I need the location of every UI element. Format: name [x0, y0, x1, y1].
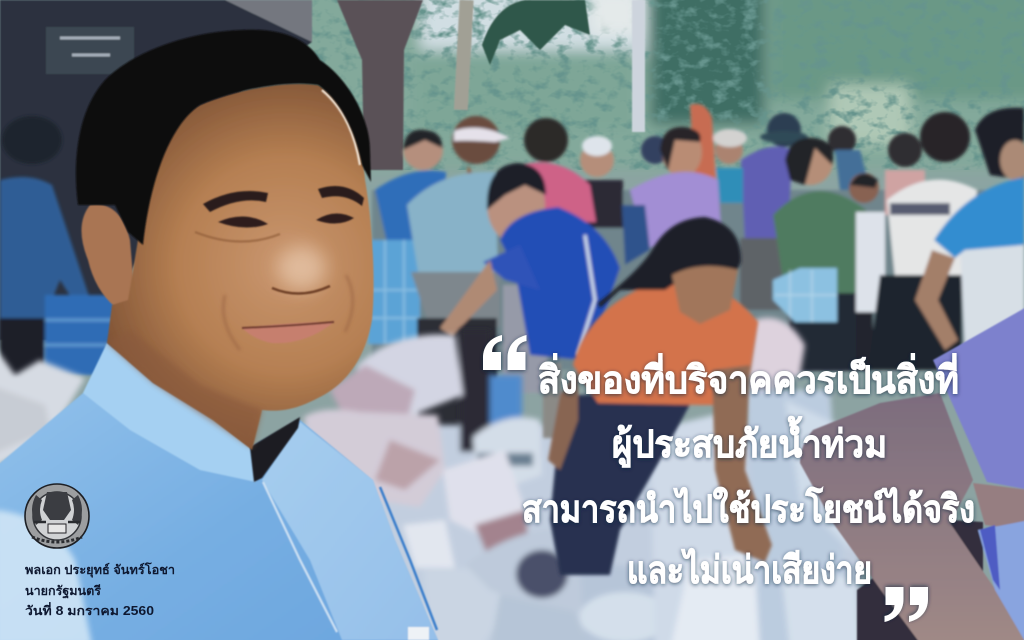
shirt bright left fold [0, 510, 92, 640]
tree trunks, pole and palm leaves [337, 0, 645, 170]
man in blue sports shirt [440, 163, 620, 360]
building at top left [0, 0, 312, 340]
quote text: สิ่งของที่บริจาคควรเป็นสิ่งที่ [538, 353, 959, 402]
eyes [195, 213, 354, 242]
left man in blue loading water [0, 116, 115, 378]
ear [81, 204, 135, 307]
icon: closing quote mark [884, 587, 928, 622]
eyebrows [203, 186, 364, 212]
inner dark collar and neck shadow [250, 417, 300, 482]
forehead edge highlight [322, 90, 360, 165]
foreground person: arm and sleeve at right [800, 305, 1024, 640]
smile lines [223, 275, 353, 350]
caption: name, title and date [25, 562, 175, 618]
trees and sky [0, 0, 1024, 340]
woman in red-orange shirt, rear [690, 104, 716, 180]
woman in orange shirt sorting bags [543, 217, 772, 575]
government seal [25, 484, 89, 548]
quote text: และไม่เน่าเสียง่าย [627, 548, 872, 592]
blue polo man [375, 130, 446, 265]
woman with visor [407, 116, 510, 443]
woman in lilac polo [622, 127, 722, 265]
shirt edge [380, 487, 437, 630]
smile [242, 322, 334, 343]
shirt placket line [263, 482, 337, 632]
child in cap with blue shirt [713, 129, 747, 203]
woman in green shirt holding bottles [773, 138, 866, 371]
shirt collar [83, 343, 256, 482]
face and neck [107, 84, 374, 450]
donation bags [0, 318, 860, 640]
water bottles, left [368, 240, 420, 344]
neck shadow under jaw [107, 330, 262, 448]
pocket badge [408, 627, 429, 640]
man with check pants [503, 285, 547, 393]
caption: name, title and date: นายกรัฐมนตรี [25, 584, 101, 599]
woman in white barcode shirt [868, 112, 977, 370]
shirt right panel [262, 422, 438, 640]
crowd [368, 104, 1024, 443]
girl in white [849, 173, 885, 370]
woman in blue and white polo, right [915, 108, 1024, 350]
rear heads [828, 126, 856, 154]
caption: name, title and date: พลเอก ประยุทธ์ จันทร์โอชา [25, 562, 175, 578]
shirt [0, 343, 438, 640]
purple man with hat [740, 113, 808, 310]
caption: name, title and date: วันที่ 8 มกราคม 2560 [25, 602, 154, 618]
icon: opening quote mark [483, 335, 526, 370]
portrait of the Prime Minister [0, 30, 438, 640]
woman in pink [521, 118, 596, 222]
nose [272, 246, 330, 294]
hair [76, 30, 371, 245]
quote text [522, 353, 975, 592]
quote text: ผู้ประสบภัยน้ำท่วม [612, 416, 887, 468]
